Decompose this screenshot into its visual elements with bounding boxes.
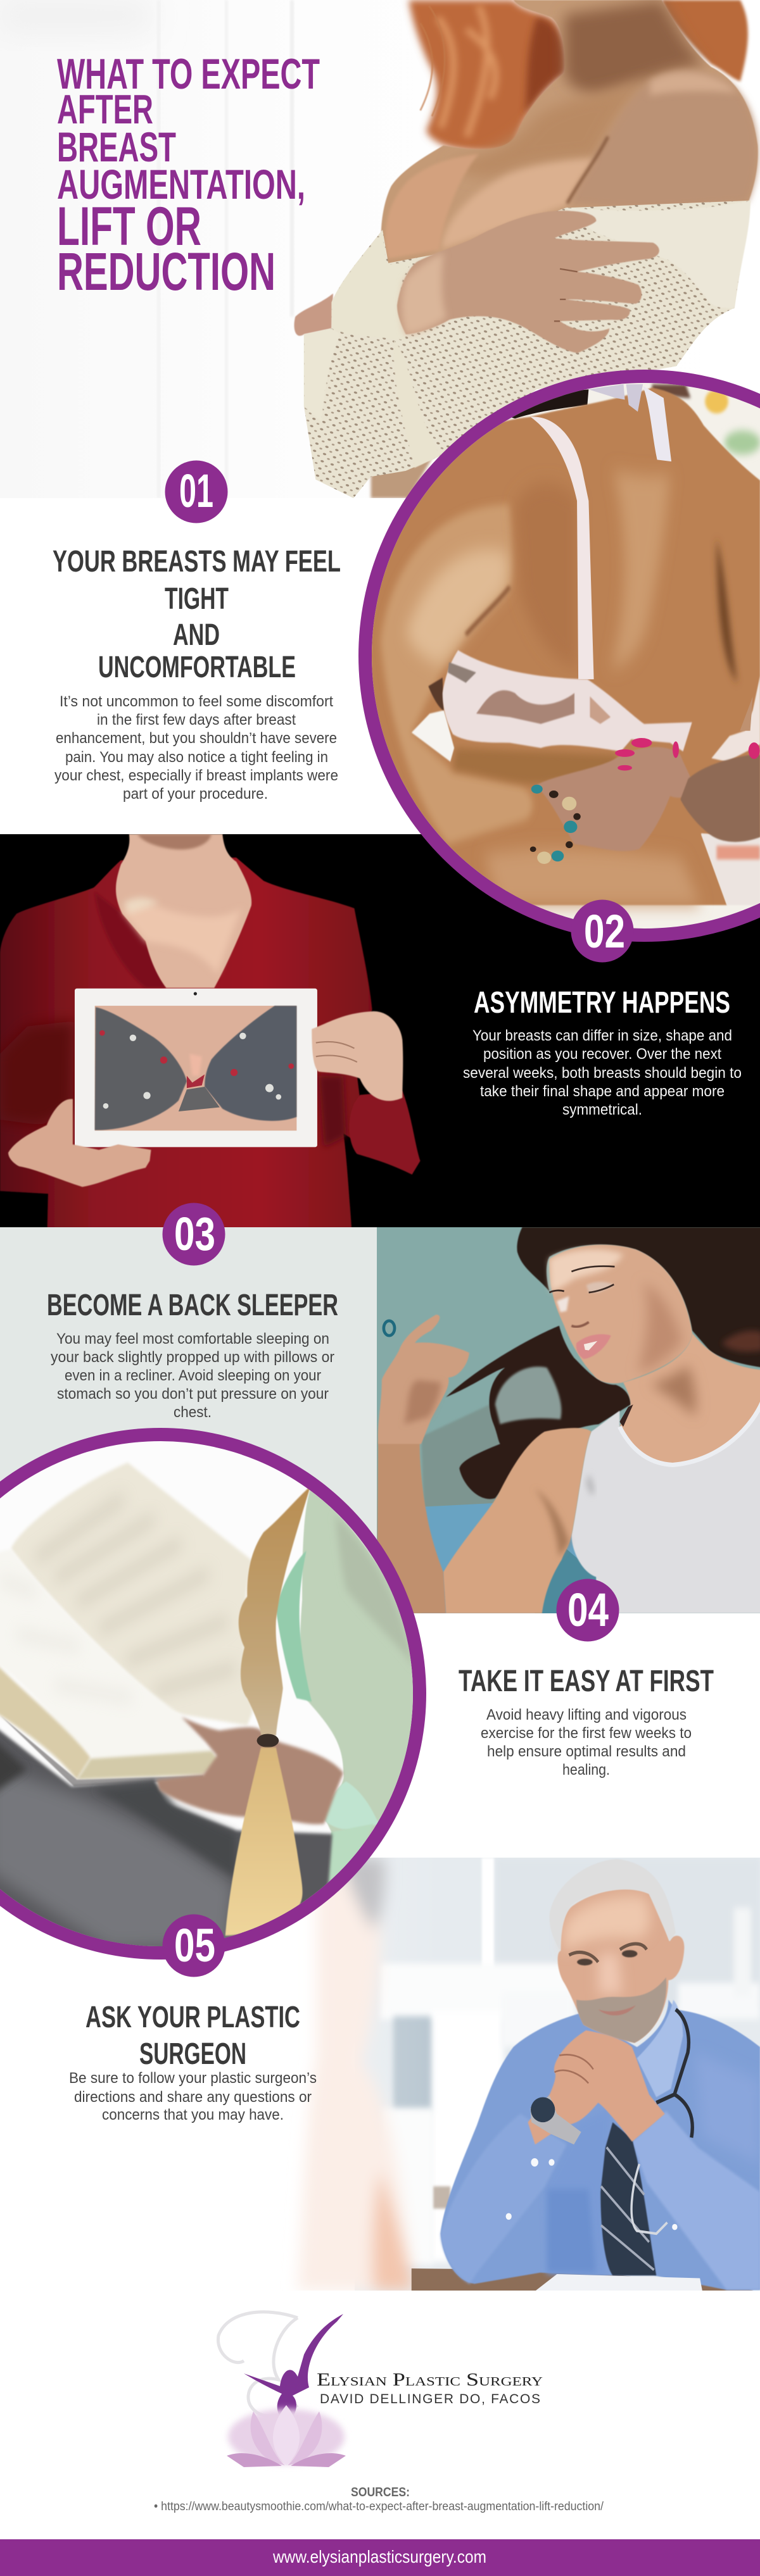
pillow logo marks: [384, 1321, 395, 1335]
step 3 body text: even in a recliner. Avoid sleeping on your: [65, 1367, 321, 1384]
neck and chest: [619, 1333, 760, 1465]
skin below sweater: [369, 460, 434, 498]
red shirt: [0, 858, 372, 1228]
blonde braid: [239, 1486, 310, 1735]
grey beard: [576, 1977, 666, 2043]
desk: [412, 2268, 760, 2292]
panel: gray step 3 background: [0, 1227, 377, 1670]
logo wordmark: Elysian Plastic Surgery: [317, 2370, 543, 2390]
hair top: [517, 1227, 760, 1368]
grey couch: [0, 1722, 332, 1949]
bg lower right: [701, 834, 760, 905]
step 3 heading: BECOME A BACK SLEEPER: [47, 1289, 338, 1322]
logo purple dancer: [244, 2314, 343, 2425]
number badge 04: 04: [567, 1584, 609, 1636]
step 1 body text: It’s not uncommon to feel some discomfort: [60, 693, 333, 710]
collar shade: [95, 892, 166, 988]
silver hair: [550, 1859, 676, 1951]
step 4 body text: exercise for the first few weeks to: [481, 1725, 692, 1742]
step 2 body text: position as you recover. Over the next: [483, 1046, 721, 1063]
right bra end: [711, 676, 760, 761]
step 2 body text: [463, 1027, 742, 1118]
forearm: [377, 1439, 446, 1613]
lips: [576, 1334, 611, 1359]
number badge 02: 02: [584, 905, 625, 958]
doctor shirt: [441, 1999, 760, 2290]
hand holding book: [156, 1717, 343, 1824]
hair tie: [257, 1734, 279, 1748]
tie: [600, 2122, 656, 2275]
eyes and brows: [577, 1950, 637, 1965]
step 3 body text: chest.: [174, 1404, 212, 1421]
step 1 heading: UNCOMFORTABLE: [98, 651, 296, 684]
tank top: [571, 1399, 760, 1613]
hair left: [408, 0, 565, 151]
step 4 body text: help ensure optimal results and: [487, 1743, 686, 1760]
number badge 02: [571, 900, 633, 962]
sources: SOURCES:: [351, 2485, 410, 2499]
sources: [154, 2485, 604, 2513]
step 2 body text: symmetrical.: [562, 1101, 642, 1118]
title: AUGMENTATION,: [57, 161, 305, 208]
stethoscope: [656, 2010, 692, 2137]
wristwatch: [530, 2096, 581, 2144]
left sleeve: [441, 2114, 567, 2284]
step 1 body text: part of your procedure.: [123, 785, 268, 803]
step 3 body text: [51, 1330, 334, 1421]
step 5 body text: Be sure to follow your plastic surgeon’s: [69, 2070, 317, 2087]
left hand behind: [294, 294, 333, 336]
hair right: [662, 0, 748, 82]
panel: hero photo of woman in knit sweater: [0, 0, 760, 498]
tablet: [75, 989, 317, 1147]
logo lotus flower: [227, 2405, 346, 2467]
step 2 body text: take their final shape and appear more: [480, 1083, 725, 1100]
bra strap: [531, 416, 594, 679]
number badge 01: [165, 461, 228, 523]
back skin: [355, 388, 760, 905]
back book page: [11, 1463, 253, 1725]
upper arm: [443, 1428, 592, 1613]
step 5 body text: concerns that you may have.: [102, 2106, 284, 2123]
step 5 body text: [69, 2070, 317, 2123]
panel: sleeping woman photo: [377, 1227, 760, 1614]
mint lace trim: [276, 1551, 312, 1702]
back shading: [515, 483, 577, 669]
lit breast: [441, 158, 595, 250]
tablet bra cups: [95, 1007, 187, 1130]
step 1 body text: pain. You may also notice a tight feeling in: [65, 749, 328, 766]
number badge 03: [162, 1203, 225, 1266]
step 1 body text: enhancement, but you shouldn’t have severe: [56, 730, 337, 747]
step 1 body text: [54, 693, 338, 803]
right hand: [680, 755, 760, 842]
title: BREAST: [57, 123, 176, 170]
neck ribbon: [643, 386, 671, 461]
step 5 body text: directions and share any questions or: [74, 2089, 312, 2106]
front book page: [0, 1549, 212, 1758]
panel: doctor consultation photo: [0, 1858, 760, 2292]
bracelet: [530, 785, 581, 864]
number badge 04: [556, 1579, 619, 1642]
white gap by arm: [412, 710, 454, 761]
right sleeve: [632, 2111, 760, 2290]
step 1 body text: your chest, especially if breast implants were: [54, 767, 338, 784]
step 4 body text: [481, 1706, 692, 1779]
step 4 body text: Avoid heavy lifting and vigorous: [486, 1706, 687, 1723]
left hand: [536, 747, 695, 851]
head: [558, 1889, 684, 2043]
left hand: [8, 1099, 151, 1187]
ribbon bow: [588, 384, 643, 411]
step 5 heading: [86, 2001, 300, 2071]
step 2 body text: Your breasts can differ in size, shape and: [472, 1027, 732, 1044]
step 5 heading: SURGEON: [139, 2037, 246, 2071]
logo tagline: DAVID DELLINGER DO, FACOS: [320, 2392, 540, 2406]
title: REDUCTION: [57, 242, 276, 301]
pink nails: [615, 738, 760, 771]
eye and brow: [549, 1266, 614, 1292]
footer bar: www.elysianplasticsurgery.com: [272, 2547, 486, 2567]
number badge 01: 01: [179, 465, 213, 517]
panel: white step 1 background: [0, 498, 481, 834]
blurred patient seen from behind: [298, 1858, 415, 2291]
flowing hair: [446, 1326, 631, 1499]
number badge 05: [162, 1914, 225, 1977]
face: [549, 1245, 692, 1384]
title: [57, 50, 320, 301]
number badge 05: 05: [174, 1919, 215, 1972]
clasped hands: [528, 2030, 665, 2144]
logo: Elysian Plastic Surgery: [218, 2312, 543, 2467]
footer bar: [0, 2539, 760, 2576]
panel: black step 2 photo of woman holding tablet: [0, 834, 760, 1228]
shoulder: [567, 71, 757, 209]
lace bra band: [443, 650, 692, 751]
circle photo: woman fastening bra with purple ring: [355, 367, 760, 949]
papers: [535, 2274, 702, 2291]
panel: white step 4 background: [405, 1613, 760, 1858]
sage green top: [300, 1488, 429, 1892]
skin torso: [381, 0, 758, 265]
title: WHAT TO EXPECT: [57, 50, 320, 98]
step 1 heading: AND: [173, 618, 220, 652]
number badge 03: 03: [174, 1208, 215, 1260]
blonde ponytail: [225, 1748, 303, 1935]
knit sweater: [304, 201, 750, 498]
step 5 heading: ASK YOUR PLASTIC: [86, 2001, 300, 2034]
step 3 body text: You may feel most comfortable sleeping on: [56, 1330, 329, 1347]
step 1 body text: in the first few days after breast: [97, 711, 296, 728]
hand on arm: [397, 211, 659, 353]
step 1 heading: [53, 545, 341, 684]
neck and chest skin: [116, 834, 251, 988]
step 2 body text: several weeks, both breasts should begin to: [463, 1065, 742, 1082]
pillow lower shade: [421, 1385, 564, 1508]
title: LIFT OR: [57, 196, 201, 257]
logo script E: [218, 2312, 298, 2416]
arm highlight: [381, 504, 533, 844]
step 3 body text: your back slightly propped up with pillows or: [51, 1349, 334, 1366]
step 1 heading: TIGHT: [165, 582, 229, 616]
blue sheet: [421, 1503, 598, 1613]
right hand: [312, 1011, 403, 1101]
sources: • https://www.beautysmoothie.com/what-to-expect-after-breast-augmentation-lift-reduction/: [154, 2500, 604, 2513]
rolled sleeve cuff: [350, 1091, 421, 1175]
step 3 body text: stomach so you don’t put pressure on your: [57, 1385, 329, 1403]
title: AFTER: [57, 86, 153, 132]
book spine and edges: [0, 1661, 91, 1780]
hand: [378, 1315, 469, 1444]
step 4 body text: healing.: [562, 1761, 610, 1779]
step 1 heading: YOUR BREASTS MAY FEEL: [53, 545, 341, 578]
circle photo: woman reading with purple ring: [0, 1428, 429, 1960]
